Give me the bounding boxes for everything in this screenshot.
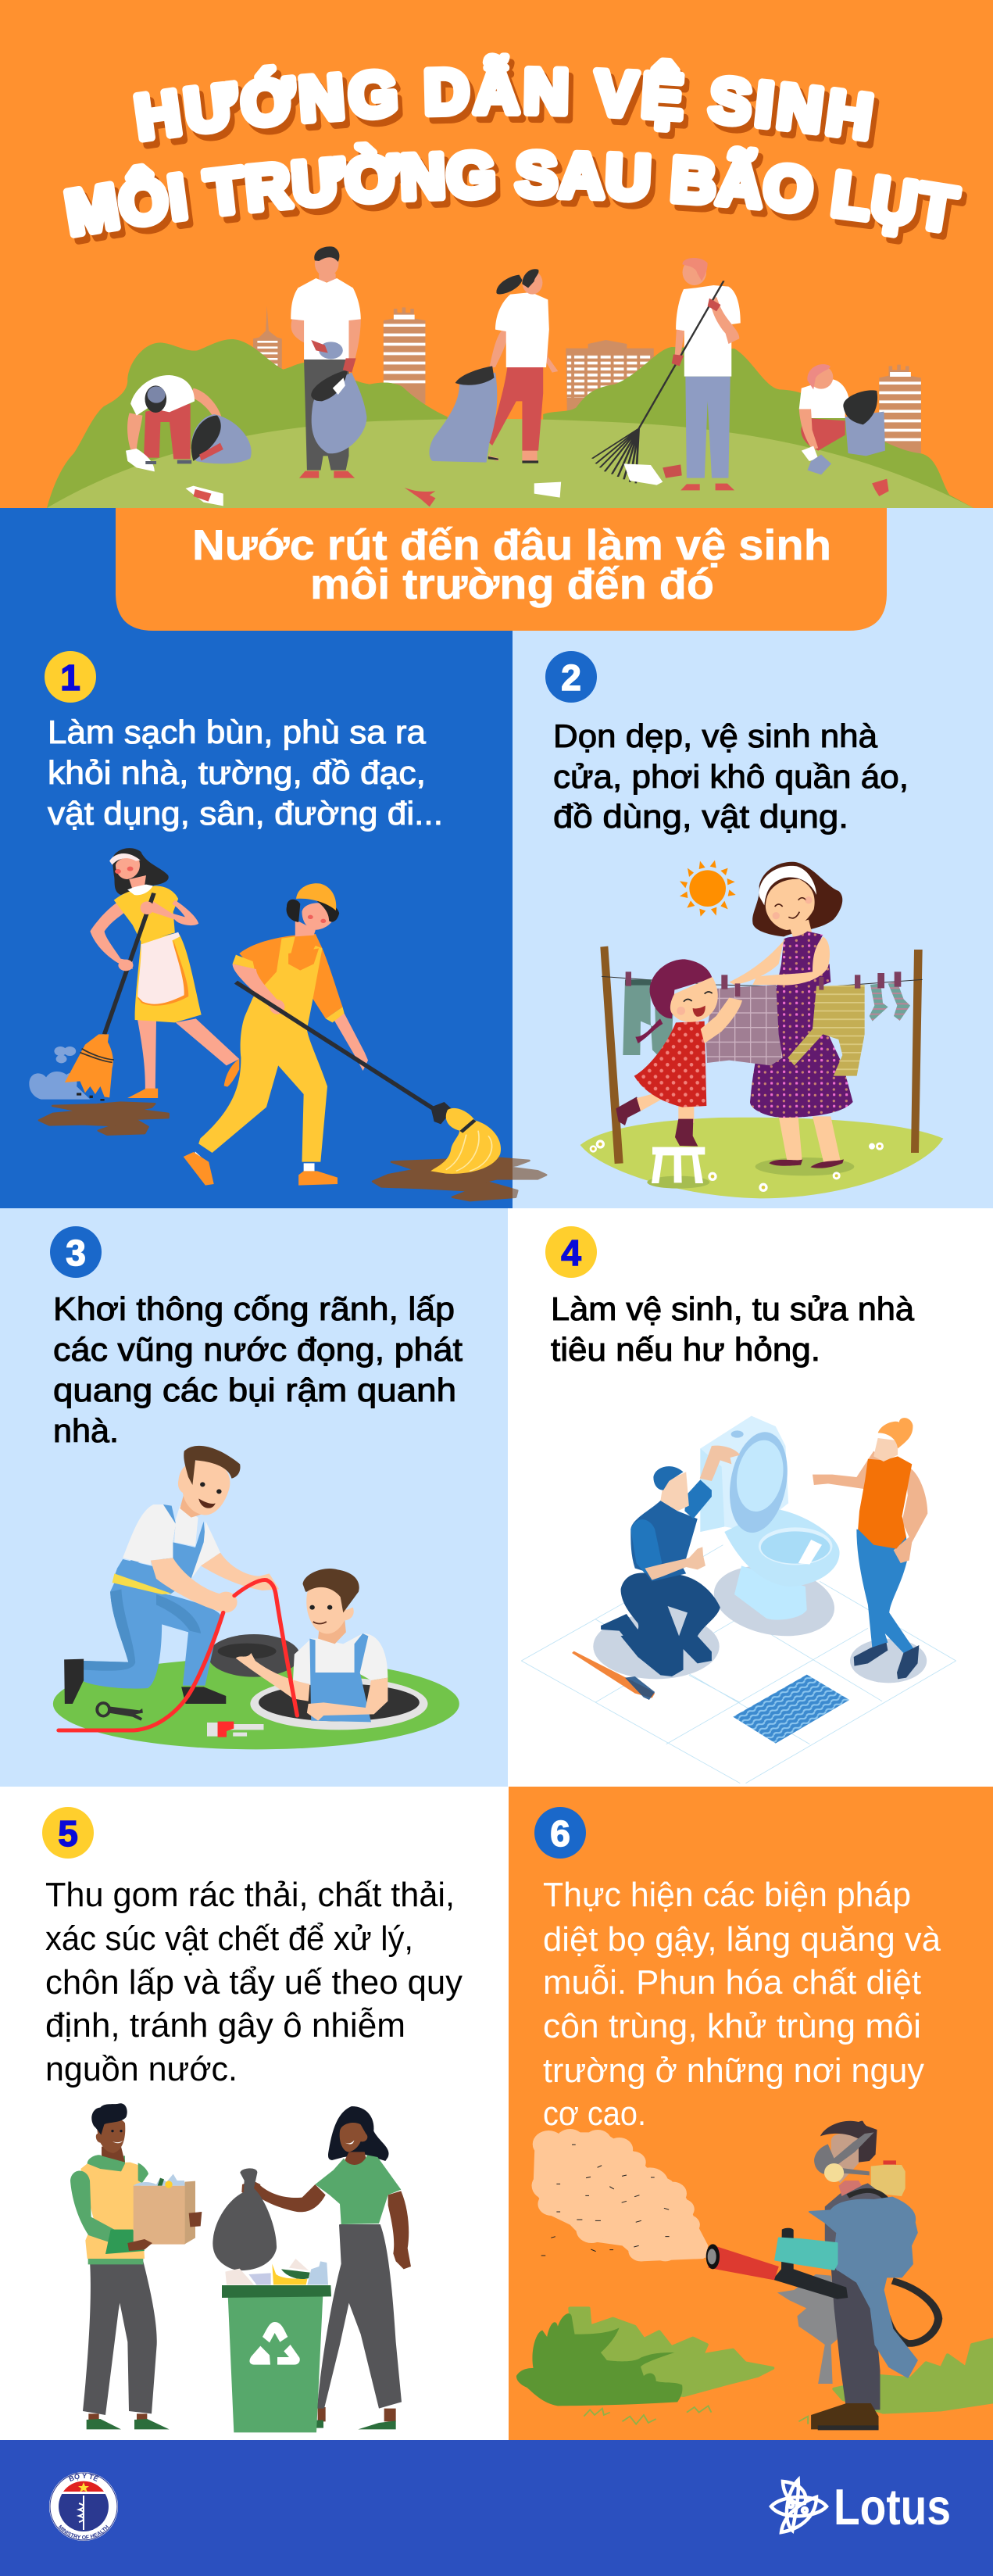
- step badge 4: 4: [561, 1233, 581, 1273]
- washing: striped baby trousers: [788, 985, 865, 1076]
- floor tiles: [521, 1545, 956, 1784]
- step 6 text: trường ở những nơi nguy: [543, 2052, 924, 2090]
- buildings: [253, 306, 921, 453]
- logo: ministry of health: [49, 2472, 118, 2541]
- stool: [652, 1147, 705, 1183]
- flowers: [590, 1140, 884, 1192]
- step 1 text: khỏi nhà, tường, đồ đạc,: [48, 754, 426, 791]
- step 6 text: Thực hiện các biện pháp: [543, 1876, 911, 1914]
- step 2 text: cửa, phơi khô quần áo,: [553, 758, 909, 795]
- step 5 text: xác súc vật chết để xử lý,: [45, 1919, 413, 1958]
- waste in the bin: [225, 2259, 328, 2284]
- washing: checked towel: [705, 985, 783, 1065]
- logo: ministry of health: MINISTRY OF HEALTH: [58, 2524, 109, 2539]
- panel 5: waste: [0, 1787, 509, 2440]
- step 2 text: đồ dùng, vật dụng.: [553, 798, 848, 835]
- girl: [616, 959, 742, 1183]
- green glove: [775, 2238, 837, 2270]
- illustration: plumber repairing a toilet: [521, 1416, 956, 1784]
- plumber: [601, 1446, 740, 1676]
- illustration: woman sweeping and man mopping: [29, 848, 546, 1200]
- step badge 2: 2: [561, 657, 581, 698]
- step 2 text: [553, 717, 909, 835]
- step 3 text: quang các bụi rậm quanh: [53, 1372, 456, 1408]
- step 4 text: tiêu nếu hư hỏng.: [551, 1331, 820, 1368]
- logo: ministry of health: BỘ Y TẾ: [69, 2473, 99, 2481]
- man with rake: [592, 258, 741, 490]
- woman: [241, 2106, 411, 2429]
- mud seen through the panel edge: [513, 1125, 559, 1204]
- red hose: [59, 1580, 297, 1730]
- wrench: [97, 1703, 143, 1721]
- logo: lotus: [771, 2478, 951, 2535]
- person bending over: [126, 375, 252, 471]
- ground: [47, 419, 973, 508]
- illustration: two workers clearing a drain: [53, 1446, 459, 1749]
- garbage bag: [213, 2168, 277, 2270]
- step 6 text: cơ cao.: [543, 2095, 646, 2133]
- step 6 text: côn trùng, khử trùng môi: [543, 2007, 921, 2045]
- panel 1: clean mud: [0, 508, 559, 1208]
- man: [184, 883, 501, 1186]
- icon: recycling symbol: [249, 2322, 300, 2365]
- litter on the ground: [186, 479, 889, 506]
- hose loop: [886, 2281, 938, 2343]
- mud puddles: [39, 1103, 546, 1200]
- wrench: [572, 1651, 655, 1698]
- title: MÔI TRƯỜNG SAU BÃO LỤT: [63, 141, 967, 245]
- mother: [729, 862, 853, 1168]
- step 5 text: định, tránh gây ô nhiễm: [45, 2006, 405, 2045]
- dust cloud: [29, 1046, 90, 1100]
- hills: [47, 339, 973, 508]
- step 6 text: diệt bọ gậy, lăng quăng và: [543, 1920, 941, 1959]
- illustration: man and woman with recycling bin: [70, 2103, 411, 2432]
- step 3 text: các vũng nước đọng, phát: [53, 1331, 463, 1368]
- illustration: man spraying insecticide: [516, 2121, 993, 2430]
- lotus flower mark: [771, 2479, 827, 2532]
- banner heading: Nước rút đến đâu làm vệ sinh: [192, 521, 831, 569]
- step 5 text: nguồn nước.: [45, 2050, 238, 2088]
- washing: socks: [870, 982, 910, 1021]
- step 1 text: [48, 714, 443, 832]
- washing: trousers: [623, 979, 666, 1055]
- step badge 6: 6: [550, 1813, 570, 1854]
- blue apron: [809, 2198, 917, 2377]
- title: HƯỚNG DẪN VỆ SINH: [133, 52, 880, 148]
- step 4 text: [551, 1290, 915, 1368]
- step 1 text: Làm sạch bùn, phù sa ra: [48, 714, 427, 750]
- banner heading: [192, 521, 831, 608]
- woman: [65, 848, 239, 1101]
- manhole cover: [208, 1634, 300, 1677]
- step 6 text: [543, 1876, 941, 2133]
- clothes pegs: [626, 971, 901, 996]
- open manhole: [250, 1678, 427, 1730]
- step badge 6: [534, 1807, 586, 1859]
- step 5 text: [45, 1876, 463, 2088]
- banner: [116, 508, 887, 631]
- light bushes: [570, 2308, 773, 2395]
- shadows: [593, 1614, 720, 1679]
- woman with ponytail and bag: [429, 269, 558, 463]
- backpack and tank: [871, 2161, 905, 2196]
- step badge 5: 5: [58, 1813, 78, 1854]
- step 5 text: Thu gom rác thải, chất thải,: [45, 1876, 455, 1914]
- step 5 text: chôn lấp và tẩy uế theo quy: [45, 1963, 463, 2002]
- step 3 text: nhà.: [53, 1412, 119, 1449]
- recycling bin: [222, 2285, 331, 2432]
- sun: [680, 860, 736, 917]
- step badge 3: [50, 1226, 102, 1278]
- step badge 3: 3: [66, 1233, 86, 1273]
- sprayer: [773, 2228, 848, 2299]
- paper bag: [184, 2181, 195, 2245]
- man: [706, 2121, 917, 2430]
- woman: [813, 1418, 927, 1679]
- illustration: people cleaning a park: [47, 246, 973, 508]
- dark bush: [516, 2313, 682, 2406]
- step 4 text: Làm vệ sinh, tu sửa nhà: [551, 1290, 915, 1327]
- step 1 text: vật dụng, sân, đường đi...: [48, 795, 443, 832]
- mat: [733, 1675, 849, 1744]
- step 3 text: Khơi thông cống rãnh, lấp: [53, 1290, 455, 1327]
- step badge 1: 1: [60, 657, 80, 698]
- step 2 text: Dọn dẹp, vệ sinh nhà: [553, 717, 878, 754]
- mosquitoes: [541, 2145, 670, 2256]
- step 3 text: [53, 1290, 463, 1449]
- crouching woman: [799, 364, 885, 474]
- header panel: [0, 0, 993, 508]
- grass tufts: [584, 2406, 808, 2424]
- footer: [0, 2440, 993, 2576]
- man: [70, 2103, 202, 2429]
- step badge 1: [45, 651, 96, 703]
- pipe wrench: [207, 1722, 263, 1737]
- step badge 2: [545, 651, 597, 703]
- panel 2 background: hang clothes: [513, 508, 993, 1208]
- step badge 5: [42, 1807, 94, 1859]
- boots: [811, 2403, 879, 2429]
- step badge 4: [545, 1226, 597, 1278]
- panel 3: drains: [0, 1208, 508, 1787]
- banner heading: môi trường đến đó: [310, 560, 714, 608]
- kneeling worker: [64, 1446, 279, 1704]
- fog cloud: [532, 2129, 710, 2261]
- panel 6: insects: [509, 1787, 993, 2440]
- man with trash bag: [291, 246, 366, 478]
- toilet: [700, 1416, 840, 1620]
- grey tree: [777, 2274, 837, 2384]
- step 6 text: muỗi. Phun hóa chất diệt: [543, 1963, 921, 2002]
- title: [63, 52, 967, 245]
- lotus wordmark: Lotus: [834, 2478, 951, 2535]
- panel 4: toilets: [508, 1208, 993, 1787]
- illustration: mother and daughter drying clothes: [580, 860, 943, 1198]
- worker in the manhole: [236, 1569, 388, 1722]
